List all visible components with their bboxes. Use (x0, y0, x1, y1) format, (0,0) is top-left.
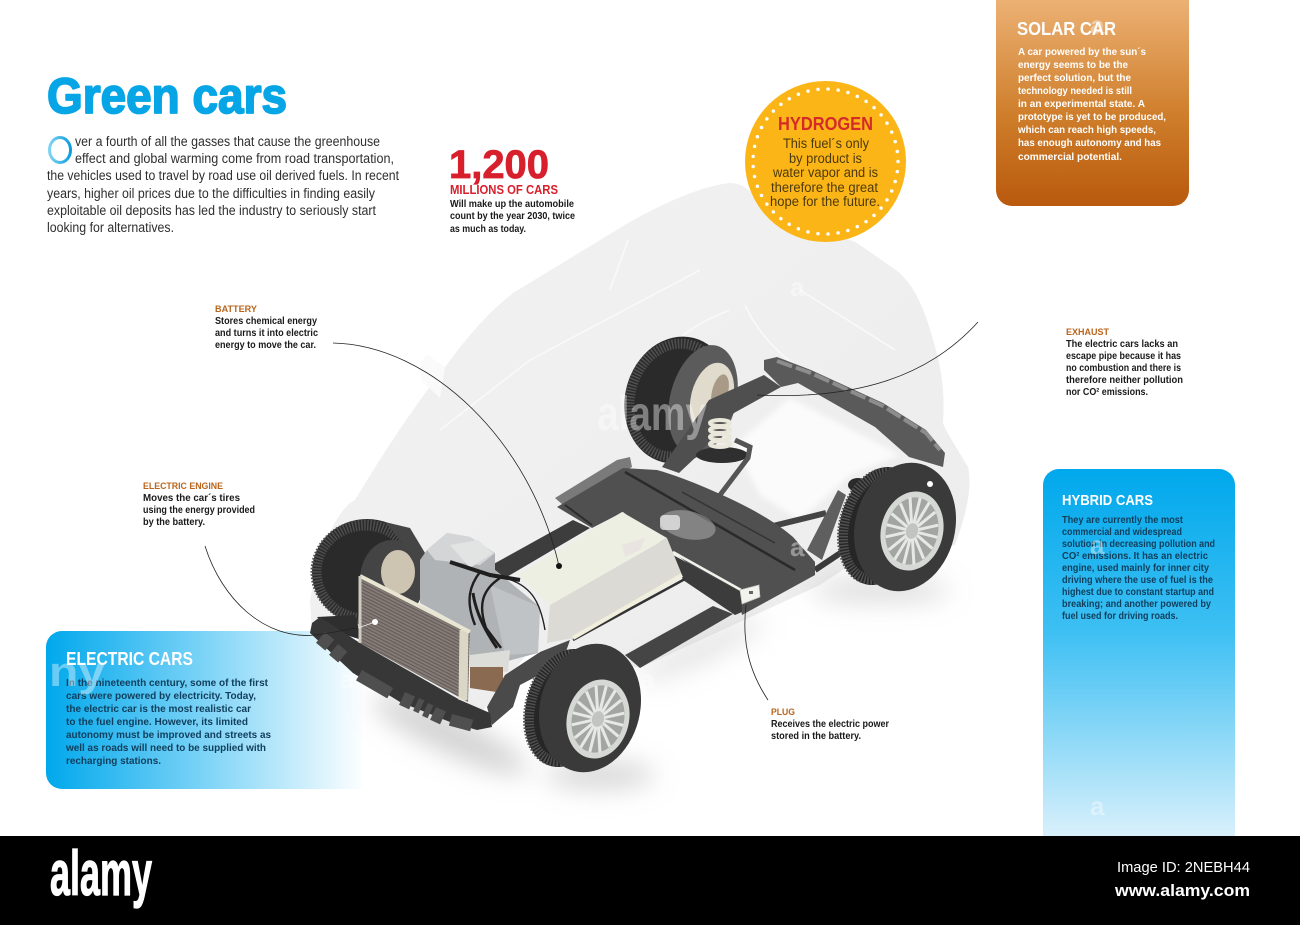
badge: hydrogen: water vapor and is (772, 165, 878, 180)
intro text: ver a fourth of all the gasses that cause the greenhouse (75, 134, 380, 149)
transparent car body (310, 183, 969, 728)
panel background: electric cars (46, 631, 365, 789)
text: electric cars: well as roads will need to be supplied with (65, 743, 266, 754)
callout: battery: BATTERY (215, 304, 258, 315)
rear frame and bumper (662, 357, 945, 495)
statistic: 1,200 million cars: 1,200 (449, 143, 549, 187)
callout: electric engine (143, 481, 255, 528)
text: solar car: which can reach high speeds, (1017, 125, 1156, 136)
text: solar car: perfect solution, but the (1018, 73, 1131, 84)
badge: hydrogen: HYDROGEN (778, 114, 873, 134)
text: hybrid cars: fuel used for driving roads. (1062, 611, 1178, 622)
statistic: 1,200 million cars: count by the year 2030, twice (450, 211, 575, 222)
front bumper (310, 617, 492, 731)
statistic: 1,200 million cars (449, 143, 575, 235)
watermarks: a (1090, 530, 1105, 560)
watermarks: ny (49, 648, 106, 695)
text: solar car: in an experimental state. A (1018, 99, 1146, 110)
text panel: electric cars (65, 649, 271, 767)
floor under the car (735, 398, 900, 520)
text: electric cars: cars were powered by electricity. Today, (66, 691, 256, 702)
text: hybrid cars: commercial and widespread (1062, 527, 1182, 538)
footer logo: alamy (50, 839, 152, 909)
text: hybrid cars: driving where the use of fuel is the (1062, 575, 1213, 586)
text: electric cars: autonomy must be improved and streets as (66, 730, 271, 741)
callout: electric engine: using the energy provided (143, 505, 255, 516)
text: electric cars (65, 678, 271, 767)
watermarks: a (790, 532, 805, 562)
badge: hydrogen: hope for the future. (770, 194, 880, 209)
text: solar car (1017, 47, 1166, 163)
text: hybrid cars: engine, used mainly for inner city (1062, 563, 1209, 574)
text: hybrid cars: They are currently the most (1062, 515, 1184, 526)
callout: battery: and turns it into electric (215, 328, 318, 339)
callout: plug (771, 707, 889, 742)
radiator (360, 576, 470, 702)
watermarks: a (1090, 791, 1105, 821)
ground shadow (365, 578, 950, 789)
callout: plug: Receives the electric power (771, 719, 889, 730)
electric motor block (420, 533, 540, 693)
heading: electric cars: ELECTRIC CARS (66, 649, 193, 669)
statistic: 1,200 million cars: MILLIONS OF CARS (450, 183, 558, 197)
text: solar car: energy seems to be the (1018, 60, 1128, 71)
callout: plug: stored in the battery. (771, 731, 861, 742)
near rear wheel (827, 452, 969, 602)
intro text (47, 134, 399, 235)
intro text: effect and global warming come from road transportation, (75, 151, 394, 166)
callout: electric engine: ELECTRIC ENGINE (143, 481, 224, 492)
callout: exhaust: nor CO² emissions. (1066, 387, 1148, 398)
callout: battery: energy to move the car. (215, 340, 316, 351)
callout: exhaust: therefore neither pollution (1066, 375, 1183, 386)
statistic: 1,200 million cars: as much as today. (450, 224, 526, 235)
intro text: years, higher oil prices due to the difficulties in finding easily (47, 186, 375, 201)
far front wheel (312, 519, 425, 640)
text: solar car: has enough autonomy and has (1018, 138, 1161, 149)
radiator marker (372, 619, 378, 625)
chassis platform (490, 457, 815, 668)
cables (450, 562, 545, 648)
statistic: 1,200 million cars: Will make up the automobile (450, 199, 574, 210)
front fender (487, 640, 570, 725)
drop cap (50, 138, 70, 162)
intro text: the vehicles used to travel by road use oil derived fuels. In recent (47, 168, 399, 183)
image id: Image ID: 2NEBH44 (1117, 859, 1250, 876)
battery (517, 512, 682, 643)
text: solar car: commercial potential. (1018, 152, 1122, 163)
badge: hydrogen: by product is (789, 151, 862, 166)
footer url: www.alamy.com (1114, 881, 1250, 900)
far rear wheel (611, 325, 749, 475)
callout: exhaust: EXHAUST (1066, 327, 1109, 338)
panel: hybrid cars (1043, 469, 1235, 836)
callout: battery (215, 304, 318, 351)
watermarks (49, 10, 1105, 821)
text: solar car: prototype is yet to be produced, (1018, 112, 1166, 123)
text: hybrid cars: highest due to constant startup and (1062, 587, 1214, 598)
heading: hybrid cars: HYBRID CARS (1062, 493, 1153, 509)
plug (740, 585, 760, 604)
text: hybrid cars: breaking; and another powered by (1062, 599, 1211, 610)
callout: battery: Stores chemical energy (215, 316, 317, 327)
watermarks: a (790, 272, 805, 302)
text: electric cars: recharging stations. (66, 756, 161, 767)
text: electric cars: the electric car is the most realistic car (66, 704, 251, 715)
text: electric cars: to the fuel engine. However, its limited (66, 717, 248, 728)
panel: solar car (996, 0, 1189, 206)
title: Green cars (47, 68, 287, 124)
text: hybrid cars (1062, 515, 1215, 622)
badge: hydrogen: therefore the great (771, 180, 878, 195)
suspension spring (710, 420, 730, 447)
watermarks: a (1090, 10, 1105, 40)
callout: exhaust: no combustion and there is (1066, 363, 1181, 374)
callout: electric engine: Moves the car´s tires (143, 493, 240, 504)
leader lines (205, 322, 978, 700)
badge: hydrogen (745, 81, 906, 242)
callout: exhaust (1066, 327, 1183, 398)
text: electric cars: In the nineteenth century, some of the first (66, 678, 269, 689)
heading: solar car: SOLAR CAR (1017, 19, 1116, 39)
text: hybrid cars: solution in decreasing pollution and (1062, 539, 1215, 550)
callout: plug: PLUG (771, 707, 795, 718)
intro text: exploitable oil deposits has led the industry to seriously start (47, 203, 376, 218)
callout: exhaust: The electric cars lacks an (1066, 339, 1178, 350)
near front wheel (513, 633, 654, 783)
watermarks: a (640, 664, 655, 694)
callout: electric engine: by the battery. (143, 517, 205, 528)
badge: hydrogen: This fuel´s only (783, 136, 869, 151)
footer bar (0, 836, 1300, 925)
watermarks: alamy (597, 388, 707, 441)
text: solar car: A car powered by the sun´s (1018, 47, 1146, 58)
rear near strut (773, 478, 868, 570)
callout: exhaust: escape pipe because it has (1066, 351, 1181, 362)
intro text: looking for alternatives. (47, 220, 174, 235)
text: hybrid cars: CO² emissions. It has an electric (1062, 551, 1208, 562)
text: solar car: technology needed is still (1018, 86, 1132, 97)
watermarks: a (340, 664, 355, 694)
